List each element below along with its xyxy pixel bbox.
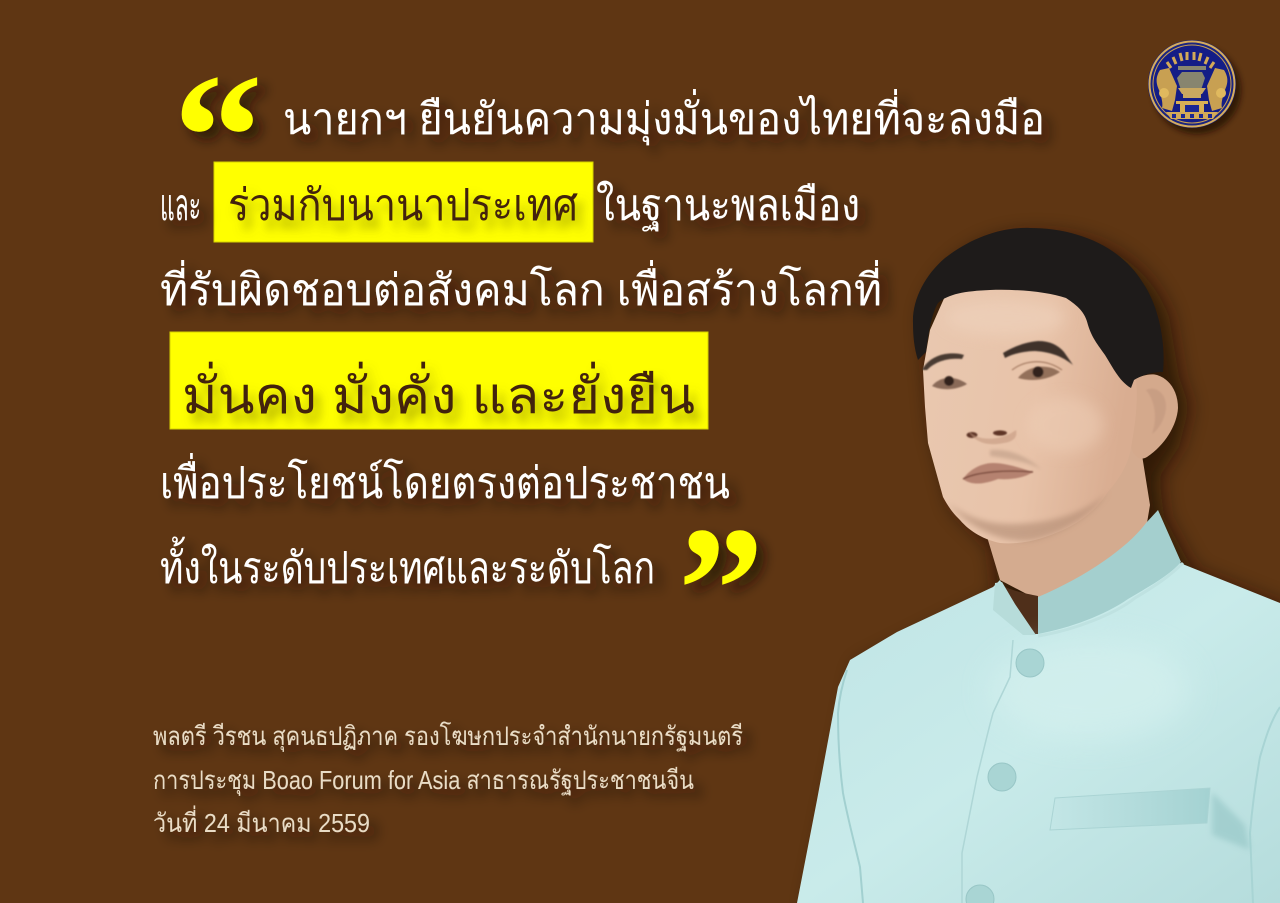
- pocket shadow: [1212, 792, 1250, 850]
- line 3: ที่รับผิดชอบต่อสังคมโลก เพื่อสร้างโลกที่: [160, 259, 882, 315]
- ear: [1128, 374, 1178, 459]
- line 2 start: และ: [160, 181, 201, 230]
- highlighted phrase 1: ร่วมกับนานาประเทศ: [228, 181, 578, 230]
- left eye: [932, 378, 967, 389]
- portrait shadow: [809, 235, 1280, 903]
- highlight box 2: [170, 332, 708, 429]
- cheek highlight: [1027, 397, 1103, 453]
- line 2 end: ในฐานะพลเมือง: [596, 180, 860, 231]
- emblem: government seal: [1148, 40, 1241, 134]
- highlight box 1: [214, 162, 593, 242]
- lip line: [963, 471, 1033, 479]
- right eyebrow: [1003, 341, 1073, 365]
- button 2: [988, 763, 1016, 791]
- eye crease: [1012, 362, 1062, 370]
- placket line: [962, 640, 1013, 903]
- portrait: [797, 228, 1280, 903]
- quote text: [160, 88, 1045, 593]
- line 6: ทั้งในระดับประเทศและระดับโลก: [160, 536, 655, 593]
- jacket: [797, 563, 1280, 903]
- standing collar: [1038, 510, 1181, 634]
- hair: [913, 228, 1164, 388]
- nose underside: [968, 430, 1016, 444]
- left nostril: [966, 432, 978, 438]
- right eye: [1018, 367, 1060, 380]
- collar band: [1038, 563, 1183, 636]
- left eyebrow: [922, 353, 964, 370]
- button 1: [1016, 649, 1044, 677]
- pocket: [1050, 788, 1210, 830]
- opening quotation mark: “: [173, 37, 263, 236]
- line 5: เพื่อประโยชน์โดยตรงต่อประชาชน: [160, 452, 730, 508]
- attribution line 2: การประชุม Boao Forum for Asia สาธารณรัฐประชาชนจีน: [153, 765, 694, 796]
- face: [923, 275, 1137, 543]
- right nostril: [993, 430, 1007, 436]
- closing quotation mark: ”: [678, 490, 764, 689]
- left collar: [993, 582, 1036, 635]
- attribution: [153, 721, 743, 838]
- neck shadow: [1003, 586, 1038, 634]
- attribution line 3: วันที่ 24 มีนาคม 2559: [153, 805, 370, 838]
- stubble shading: [990, 450, 1042, 470]
- highlighted text: [182, 181, 695, 424]
- sleeve seam left: [838, 670, 863, 903]
- mouth: [963, 463, 1033, 484]
- face features: [922, 341, 1073, 484]
- forehead highlight: [945, 300, 1065, 336]
- button 3: [966, 885, 994, 903]
- neck: [985, 430, 1150, 600]
- line 1: นายกฯ ยืนยันความมุ่งมั่นของไทยที่จะลงมือ: [283, 88, 1045, 146]
- highlighted phrase 2: มั่นคง มั่งคั่ง และยั่งยืน: [182, 362, 695, 424]
- chin shading: [948, 492, 1108, 541]
- lit fabric: [990, 640, 1190, 740]
- sleeve seam right: [1250, 707, 1280, 903]
- attribution line 1: พลตรี วีรชน สุคนธปฏิภาค รองโฆษกประจำสำนักนายกรัฐมนตรี: [153, 721, 743, 752]
